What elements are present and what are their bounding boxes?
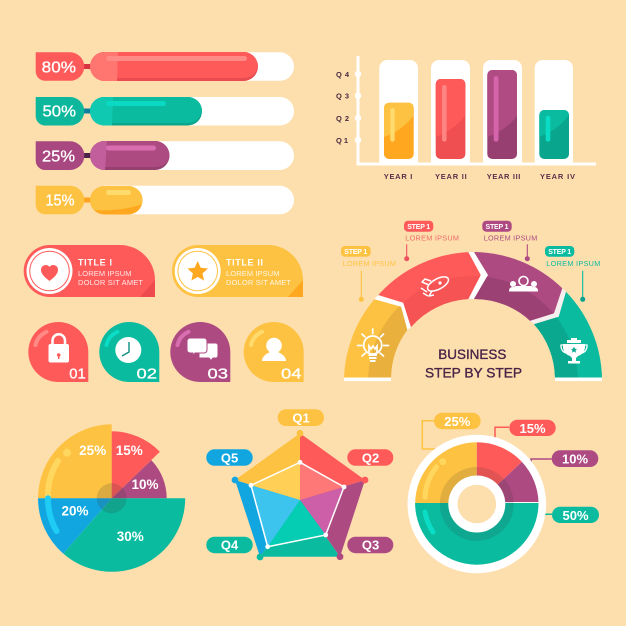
icon: star xyxy=(175,248,221,294)
column chart panel xyxy=(336,56,596,181)
year labels xyxy=(384,172,575,181)
step label yellow: LOREM IPSUM xyxy=(343,259,396,268)
label Q2: Q2 xyxy=(362,450,379,465)
label Q5 xyxy=(206,449,253,466)
progress bar 15%: 15% xyxy=(46,193,75,210)
label 25% xyxy=(434,413,481,429)
pie labels xyxy=(61,443,159,544)
label Q4: Q4 xyxy=(221,538,239,553)
pie highlights xyxy=(48,461,58,498)
icon: chat bubbles xyxy=(187,338,218,360)
step label red xyxy=(404,221,459,261)
drop badge 04: 04 xyxy=(281,366,302,382)
progress bar 15% xyxy=(36,186,294,215)
donut white ring xyxy=(448,476,505,532)
drop badge 02: 02 xyxy=(136,366,157,382)
card text: TITLE I xyxy=(78,258,112,268)
radar outer wedges xyxy=(235,433,365,557)
label 10% xyxy=(552,450,598,467)
label 50% xyxy=(552,507,599,523)
drop badge 02 xyxy=(99,322,159,382)
title card I xyxy=(24,245,155,297)
quarter labels xyxy=(336,70,350,145)
slice 15% xyxy=(477,442,522,504)
slice 20% xyxy=(38,498,112,554)
axis ticks xyxy=(355,71,361,143)
slice 25% xyxy=(38,424,112,498)
icon: lock xyxy=(48,334,69,363)
card text: LOREM IPSUM xyxy=(226,269,280,278)
card text: LOREM IPSUM xyxy=(78,269,132,278)
icon: trophy xyxy=(561,338,587,364)
arc segment: yellow xyxy=(344,299,407,378)
arc segment: red xyxy=(378,252,481,327)
label Q1: Q1 xyxy=(292,410,310,425)
label 15%: 15% xyxy=(519,421,546,436)
radar data line xyxy=(251,462,344,547)
label Q5: Q5 xyxy=(221,450,238,465)
card text: TITLE II xyxy=(226,258,263,268)
white gaps between arc segments xyxy=(344,252,602,381)
step label teal: STEP 1 xyxy=(548,249,571,256)
step label yellow: STEP 1 xyxy=(344,249,367,256)
card text: DOLOR SIT AMET xyxy=(226,278,291,287)
pie labels: 10% xyxy=(131,477,159,492)
drop badge 03: 03 xyxy=(208,366,228,382)
slice 50% xyxy=(415,503,538,565)
progress bars panel xyxy=(36,50,294,215)
icon: clock xyxy=(115,337,141,363)
quarter labels: Q4 xyxy=(336,70,350,79)
arc heading xyxy=(425,347,522,381)
year labels: YEAR I xyxy=(384,172,412,181)
radar data points xyxy=(249,460,346,549)
year labels: YEAR II xyxy=(435,172,467,181)
label 15% xyxy=(509,420,556,436)
radar inner wedges xyxy=(251,462,344,547)
pie hub xyxy=(97,483,127,513)
label 50%: 50% xyxy=(562,508,589,523)
slice 30% xyxy=(63,498,185,572)
progress bar 50% xyxy=(36,95,294,126)
label Q2 xyxy=(347,449,393,466)
arc segment: purple xyxy=(474,252,562,321)
label Q3 xyxy=(347,537,393,553)
quarter labels: Q3 xyxy=(336,92,349,100)
label 25%: 25% xyxy=(444,414,471,429)
slice 15% xyxy=(112,431,160,498)
progress bar 80%: 80% xyxy=(42,59,76,76)
step by step arc panel xyxy=(341,221,602,381)
arc heading: BUSINESS xyxy=(438,347,506,362)
donut hole xyxy=(458,485,496,523)
drop badge 04 xyxy=(244,322,304,382)
progress bar 25%: 25% xyxy=(42,148,75,165)
icon: person xyxy=(262,338,286,361)
column year IV xyxy=(535,60,573,164)
icon: team xyxy=(509,276,538,292)
slice 10% xyxy=(477,462,538,504)
radar vertices xyxy=(232,430,368,560)
label Q4 xyxy=(206,537,253,553)
step label red: STEP 1 xyxy=(407,224,430,231)
card text xyxy=(226,258,291,287)
step label yellow xyxy=(341,246,396,302)
year labels: YEAR IV xyxy=(540,172,575,181)
quarter labels: Q2 xyxy=(336,114,349,123)
progress bar 25% xyxy=(36,139,294,170)
slice 10% xyxy=(112,460,167,498)
pie labels: 15% xyxy=(116,443,143,458)
donut white backing xyxy=(408,435,546,573)
donut highlights xyxy=(425,467,436,497)
pie labels: 20% xyxy=(61,504,89,518)
card text xyxy=(78,258,143,287)
label 10%: 10% xyxy=(562,452,588,466)
step label teal: LOREM IPSUM xyxy=(546,259,600,268)
pie labels: 25% xyxy=(79,443,106,458)
icon: rocket xyxy=(421,274,451,296)
icon: heart xyxy=(26,248,72,294)
step label teal xyxy=(545,246,600,302)
icon: light bulb xyxy=(358,329,388,361)
column year III xyxy=(483,60,522,164)
quarter labels: Q1 xyxy=(336,136,348,145)
card text: DOLOR SIT AMET xyxy=(78,278,143,287)
step label purple: LOREM IPSUM xyxy=(484,234,537,243)
donut chart xyxy=(408,413,599,573)
step label purple xyxy=(482,221,537,261)
label Q1 xyxy=(278,409,324,426)
pie chart xyxy=(38,424,185,572)
radar chart xyxy=(206,409,393,560)
drop badge 01: 01 xyxy=(69,366,86,382)
arc heading: STEP BY STEP xyxy=(425,366,522,381)
column year I xyxy=(379,60,418,164)
year labels: YEAR III xyxy=(487,172,520,181)
step label purple: STEP 1 xyxy=(486,224,509,231)
label Q3: Q3 xyxy=(362,538,379,553)
title card II xyxy=(172,245,303,297)
connector lines xyxy=(422,421,552,514)
progress bar 80% xyxy=(36,50,294,81)
donut inner band xyxy=(440,467,514,541)
axes xyxy=(358,56,596,164)
progress bar 50%: 50% xyxy=(42,104,76,121)
slice 25% xyxy=(415,442,477,504)
drop badge 01 xyxy=(28,322,88,382)
step label red: LOREM IPSUM xyxy=(405,234,459,243)
arc segment: teal xyxy=(534,292,602,378)
drop badge 03 xyxy=(170,322,230,382)
pie labels: 30% xyxy=(117,529,144,544)
column year II xyxy=(431,60,470,164)
